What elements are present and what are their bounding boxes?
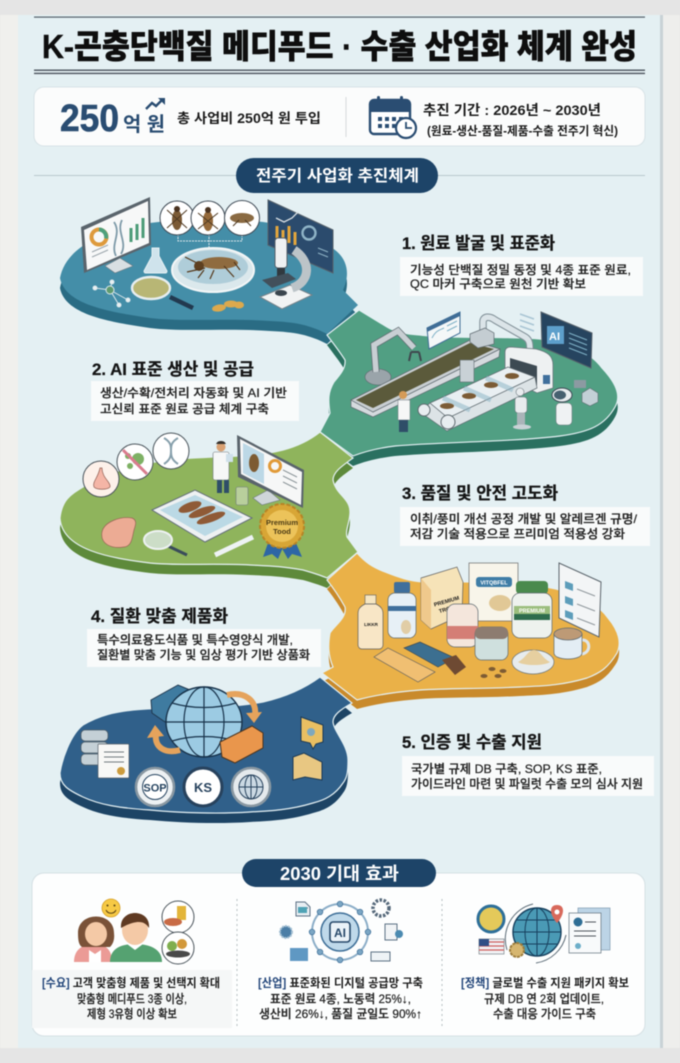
step 2 text: 2. AI 표준 생산 및 공급 — [92, 360, 254, 379]
icon: sensory circles — [83, 433, 189, 497]
budget figure: 억 원 — [123, 113, 165, 136]
icon: service robot — [552, 388, 572, 425]
icon: route map — [293, 753, 322, 780]
icon: mug — [554, 628, 589, 659]
icon: data bullets — [520, 314, 534, 331]
step 1 text: 기능성 단백질 정밀 동정 및 4종 표준 원료, — [410, 263, 631, 277]
icon: customers — [74, 899, 194, 964]
icon: global export — [478, 904, 610, 963]
icon: certificate document — [98, 744, 129, 778]
icon: location document — [301, 717, 323, 749]
period note: (원료-생산-품질-제품-수출 전주기 혁신) — [427, 123, 618, 138]
effect: policy: [정책] 글로벌 수출 지원 패키지 확보 — [461, 975, 629, 990]
icon: global seal — [232, 768, 270, 806]
step 2 text: 생산/수확/전처리 자동화 및 AI 기반 — [100, 386, 287, 400]
effect: demand: 맞춤형 메디푸드 3종 이상, — [77, 991, 187, 1006]
icon: milk carton — [421, 567, 463, 629]
icon: database — [81, 730, 108, 765]
icon: pink jar — [447, 604, 478, 647]
panel: budget and period — [34, 87, 645, 146]
effect: industry: 표준 원료 4종, 노동력 25%↓, — [270, 992, 411, 1006]
icon: premium badge: Premium — [266, 518, 298, 527]
icon: monitor with DNA chart — [81, 197, 151, 273]
icon: SOP seal — [136, 768, 174, 806]
step 5 text — [402, 733, 654, 796]
step 2 text — [91, 360, 299, 421]
period text: 추진 기간 : 2026년 ~ 2030년 — [423, 102, 601, 118]
effect: industry: 생산비 26%↓, 품질 균일도 90%↑ — [259, 1007, 422, 1021]
heading: process pill — [236, 158, 438, 193]
icon: small screen — [427, 312, 460, 349]
icon: capsules — [211, 300, 244, 313]
icon: small magnifier — [144, 531, 187, 555]
step 3 text — [400, 484, 650, 546]
icon: orange container — [220, 726, 263, 763]
icon: blue container — [151, 685, 190, 722]
icon: milk bottle — [358, 595, 383, 649]
budget text: 총 사업비 250억 원 투입 — [177, 111, 321, 126]
icon: food bubble 1 — [162, 901, 194, 933]
step 3 text: 3. 품질 및 안전 고도화 — [402, 484, 558, 503]
icon: researcher — [213, 441, 233, 493]
icon: green jar: PREMIUM — [519, 608, 545, 614]
icon: small parts — [574, 380, 598, 406]
step 4 text: 특수의료용도식품 및 특수영양식 개발, — [97, 633, 293, 647]
icon: premium badge — [260, 504, 304, 559]
panel: stage 2 platform — [320, 310, 618, 466]
icon: food bubble 2 — [162, 932, 194, 964]
icon: humanoid robot — [513, 388, 531, 430]
icon: protein pouch — [469, 563, 518, 621]
effect: policy: 수출 대응 가이드 구축 — [493, 1007, 596, 1021]
icon: second conveyor — [418, 367, 537, 431]
icon: orange arrows — [156, 694, 255, 751]
icon: magnifier — [132, 277, 193, 308]
icon: robot arm — [365, 331, 421, 385]
icon: milk bottle: LIKKR — [364, 622, 379, 627]
icon: main conveyor — [351, 328, 500, 417]
budget figure: 250 — [60, 98, 119, 140]
icon: AI screen — [541, 312, 592, 368]
step 1 text: QC 마커 구축으로 원천 기반 확보 — [410, 276, 586, 291]
title: K-곤충단백질 메디푸드 · 수출 산업화 체계 완성 — [42, 28, 637, 65]
step 4 text: 질환별 맞춤 기능 및 임상 평가 기반 상품화 — [97, 648, 310, 662]
icon: blue bottle — [388, 582, 416, 638]
heading: effects pill — [242, 859, 436, 887]
panel: stage 3 platform — [60, 432, 358, 588]
icon: small capsules — [480, 667, 506, 678]
step 4 text: 4. 질환 맞춤 제품화 — [91, 607, 228, 626]
heading: process pill: 전주기 사업화 추진체계 — [256, 167, 419, 185]
icon: tunnel machine — [505, 347, 553, 393]
icon: arrow heads — [147, 712, 262, 738]
budget figure — [60, 98, 165, 140]
heading: effects pill: 2030 기대 효과 — [280, 864, 399, 884]
icon: pipe inner — [483, 317, 530, 355]
step 5 text: 5. 인증 및 수출 지원 — [402, 733, 542, 752]
icon: test pen — [215, 537, 253, 555]
icon: pipe — [483, 317, 530, 355]
icon: globe — [166, 687, 242, 757]
step 3 text: 저감 기술 적용으로 프리미엄 적용성 강화 — [410, 527, 625, 541]
icon: microscope — [260, 238, 312, 309]
connector lines — [178, 234, 242, 254]
icon: molecule — [93, 280, 130, 307]
panel: stage 5 platform — [60, 677, 352, 823]
effect: policy: 규제 DB 연 2회 업데이트, — [484, 992, 604, 1006]
icon: dashboard panel — [268, 200, 333, 273]
icon: KS seal: KS — [194, 780, 212, 795]
effect: demand: 제형 3유형 이상 확보 — [87, 1006, 177, 1021]
effect: industry — [258, 975, 423, 1021]
icon: jar — [236, 487, 248, 505]
panel: stage 1 platform — [60, 197, 358, 344]
effect: policy — [461, 975, 629, 1021]
icon: calendar with clock — [370, 96, 416, 138]
icon: brown jar — [475, 627, 508, 660]
step 5 text: 국가별 규제 DB 구축, SOP, KS 표준, — [411, 762, 602, 776]
icon: green jar — [512, 581, 552, 638]
effect: industry: [산업] 표준화된 디지털 공급망 구축 — [258, 975, 423, 990]
panel: expected effects — [32, 859, 645, 1036]
step 3 text: 이취/풍미 개선 공정 개발 및 알레르겐 규명/ — [410, 512, 638, 526]
icon: flask — [144, 248, 167, 273]
step 1 text: 1. 원료 발굴 및 표준화 — [402, 234, 555, 253]
icon: worker — [398, 391, 410, 432]
icon: smiley — [102, 899, 120, 917]
effect: demand — [42, 975, 220, 1021]
icon: tablet with larvae — [152, 490, 252, 542]
icon: quality monitor — [237, 435, 304, 508]
step 1 text — [400, 234, 643, 296]
icon: tasting hand — [102, 518, 136, 547]
icon: petri dish with cricket — [172, 248, 254, 292]
step 5 text: 가이드라인 마련 및 파일럿 수출 모의 심사 지원 — [411, 777, 643, 791]
icon: insect circles — [160, 200, 260, 236]
panel: stage 4 platform — [322, 553, 619, 709]
icon: AI hub — [280, 900, 403, 963]
icon: checklist clipboard — [559, 563, 601, 637]
icon: snack bars — [374, 642, 466, 682]
icon: powder plate — [512, 650, 554, 674]
step 4 text — [87, 607, 321, 667]
icon: AI screen: AI — [549, 331, 560, 343]
icon: milk carton: TROD — [438, 605, 455, 615]
icon: SOP seal: SOP — [143, 782, 167, 794]
icon: protein pouch: VITQBFEL — [480, 580, 508, 586]
icon: KS seal — [184, 768, 222, 806]
icon: AI hub: AI — [334, 926, 346, 940]
effect: demand: [수요] 고객 맞춤형 제품 및 선택지 확대 — [42, 975, 220, 990]
icon: premium badge: Tood — [273, 527, 291, 536]
step 2 text: 고신뢰 표준 원료 공급 체계 구축 — [100, 402, 269, 416]
icon: milk carton: PREMIUM — [433, 595, 460, 609]
